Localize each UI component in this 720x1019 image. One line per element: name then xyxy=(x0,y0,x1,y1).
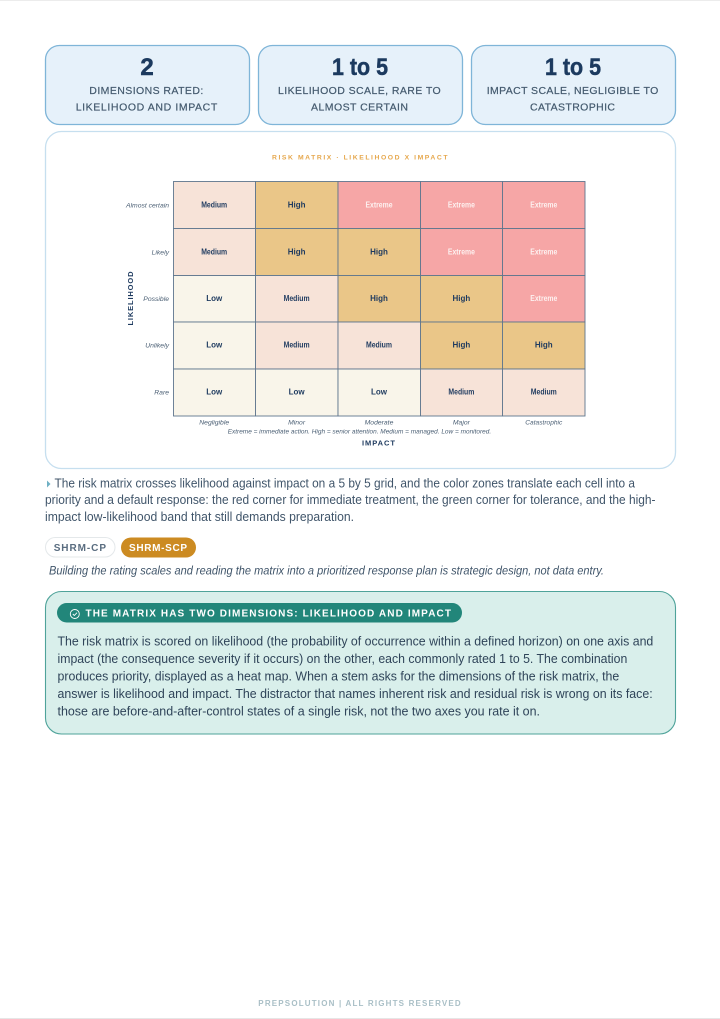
matrix legend note: Extreme = immediate action. High = senior attention. Medium = managed. Low = monitored. xyxy=(228,428,491,436)
likelihood row labels: Unlikely xyxy=(145,342,170,350)
impact column labels: Moderate xyxy=(365,419,394,426)
badge: SHRM-SCP xyxy=(121,538,196,558)
heat map grid: High xyxy=(453,341,470,350)
callout heading pill xyxy=(57,603,462,622)
heat map grid: Low xyxy=(206,388,223,397)
stat card: impact scale: 1 to 5 xyxy=(545,54,601,81)
stat card: likelihood scale: 1 to 5 xyxy=(332,54,388,81)
likelihood row labels: Rare xyxy=(154,390,169,396)
heat map grid: High xyxy=(370,294,388,303)
badge: SHRM-CP: SHRM-CP xyxy=(54,543,106,554)
impact column labels xyxy=(199,419,563,426)
impact column labels: Catastrophic xyxy=(525,419,563,426)
heat map grid: Extreme xyxy=(530,294,558,303)
footer: PREPSOLUTION | ALL RIGHTS RESERVED xyxy=(258,999,461,1008)
stat card: likelihood scale: ALMOST CERTAIN xyxy=(311,102,408,114)
heat map grid: Medium xyxy=(201,248,227,257)
callout: answer explanation xyxy=(46,592,676,734)
impact column labels: Minor xyxy=(288,419,306,426)
badge: SHRM-CP xyxy=(46,538,115,557)
callout body text: answer is likelihood and impact. The distractor that names inherent risk and residual risk is wrong on its face: xyxy=(58,687,653,701)
callout body text: those are before-and-after-control states of a single risk, not the two axes you rate it on. xyxy=(58,704,540,718)
heat map grid: High xyxy=(288,248,306,257)
icon: bullet triangle xyxy=(47,480,50,488)
likelihood row labels xyxy=(125,202,170,396)
heat map grid: Extreme xyxy=(448,201,475,210)
heat map grid: High xyxy=(370,248,388,257)
callout body text: The risk matrix is scored on likelihood (the probability of occurrence within a defined horizon) on one axis and xyxy=(58,634,653,648)
heat map grid: Low xyxy=(206,294,223,303)
impact column labels: Negligible xyxy=(199,419,229,426)
heat map grid: High xyxy=(535,341,553,350)
summary paragraph: impact low-likelihood band that still demands preparation. xyxy=(45,510,354,524)
exam level note: Building the rating scales and reading the matrix into a prioritized response plan is strategic design, not data entry. xyxy=(49,566,604,578)
heat map grid: Extreme xyxy=(366,201,393,210)
heat map grid: High xyxy=(453,294,470,303)
matrix title: RISK MATRIX · LIKELIHOOD X IMPACT xyxy=(272,154,448,162)
callout body text: produces priority, displayed as a heat map. When a stem asks for the dimensions of the risk matrix, the xyxy=(58,670,619,684)
stat card: dimensions rated: 2 xyxy=(140,54,154,81)
heat map grid: Low xyxy=(206,341,223,350)
summary paragraph: priority and a default response: the red corner for immediate treatment, the green corner for tolerance, and the high- xyxy=(45,493,656,507)
heat map grid: High xyxy=(288,201,306,210)
heat map grid: Medium xyxy=(448,388,474,397)
stat card: dimensions rated: LIKELIHOOD AND IMPACT xyxy=(76,102,218,114)
callout body text xyxy=(58,634,653,718)
stat card: likelihood scale xyxy=(258,46,462,124)
stat card: dimensions rated: DIMENSIONS RATED: xyxy=(89,85,203,97)
stat card: impact scale: CATASTROPHIC xyxy=(530,102,615,114)
heat map grid xyxy=(174,182,585,416)
likelihood row labels: Possible xyxy=(143,296,169,303)
stat card: impact scale xyxy=(472,46,676,124)
callout body text: impact (the consequence severity if it occurs) on the other, each commonly rated 1 to 5. The combination xyxy=(58,652,627,666)
panel: risk matrix xyxy=(46,132,676,468)
stat card: dimensions rated xyxy=(46,46,250,124)
heat map grid: Low xyxy=(371,388,388,397)
likelihood row labels: Likely xyxy=(152,250,170,256)
heat map grid: Low xyxy=(289,388,305,397)
heat map grid: Medium xyxy=(284,341,310,350)
summary paragraph xyxy=(45,476,656,524)
icon: check circle xyxy=(70,610,79,618)
heat map grid: Medium xyxy=(531,388,557,397)
badge: SHRM-SCP: SHRM-SCP xyxy=(129,543,187,554)
impact column labels: Major xyxy=(453,419,471,426)
heat map grid: Extreme xyxy=(448,248,475,257)
impact axis title: IMPACT xyxy=(362,438,395,448)
callout heading pill: THE MATRIX HAS TWO DIMENSIONS: LIKELIHOOD AND IMPACT xyxy=(86,608,451,619)
likelihood row labels: Almost certain xyxy=(125,202,169,210)
heat map grid: Extreme xyxy=(530,201,558,210)
stat card: impact scale: IMPACT SCALE, NEGLIGIBLE TO xyxy=(487,85,658,97)
heat map grid: Extreme xyxy=(530,248,558,257)
heat map grid: Medium xyxy=(284,294,310,303)
heat map grid: Medium xyxy=(201,201,227,210)
likelihood axis title: LIKELIHOOD xyxy=(126,271,135,326)
heat map grid: Medium xyxy=(366,341,392,350)
summary paragraph: The risk matrix crosses likelihood against impact on a 5 by 5 grid, and the color zones translate each cell into a xyxy=(54,476,635,490)
stat card: likelihood scale: LIKELIHOOD SCALE, RARE TO xyxy=(278,85,441,97)
